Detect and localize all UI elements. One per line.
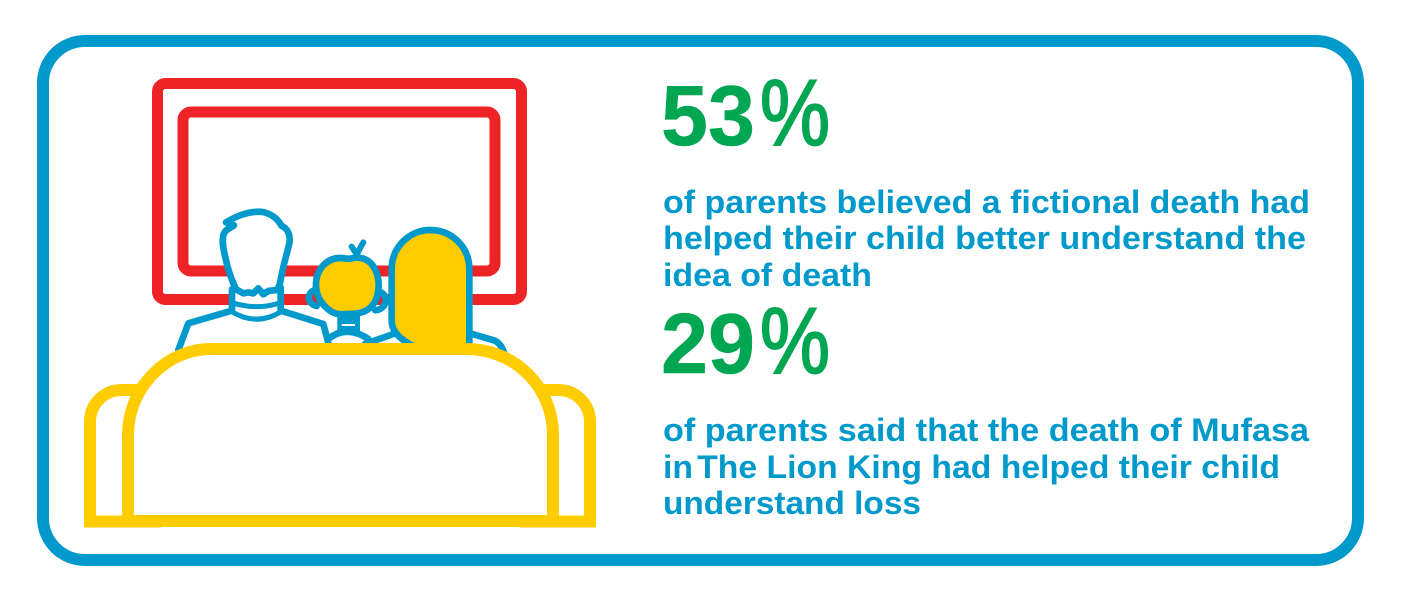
statistic: 29%: % [760,288,830,393]
text: fictional death statement: of parents believed a fictional death had [663,184,1310,220]
icon: mother from behind [365,230,504,353]
statistic: 53%: % [760,60,830,165]
text: Mufasa statement: understand loss [663,485,921,521]
statistic: 29% [661,288,830,393]
statistic: 29%: 29 [661,297,755,392]
statistic: 53% [661,60,830,165]
text: fictional death statement: helped their child better understand the [663,220,1306,256]
text: fictional death statement: idea of death [663,257,872,293]
icon: family watching television [90,84,590,522]
icon: child from behind [309,242,386,342]
icon: father from behind [178,212,329,350]
text: Mufasa statement: in The Lion King had helped their child [663,449,1280,485]
icon: television [158,84,522,300]
icon: sofa [90,349,590,522]
statistic: 53%: 53 [661,69,755,164]
text: Mufasa statement [663,412,1310,521]
text: fictional death statement [663,184,1310,293]
text: Mufasa statement: of parents said that the death of Mufasa [663,412,1310,448]
